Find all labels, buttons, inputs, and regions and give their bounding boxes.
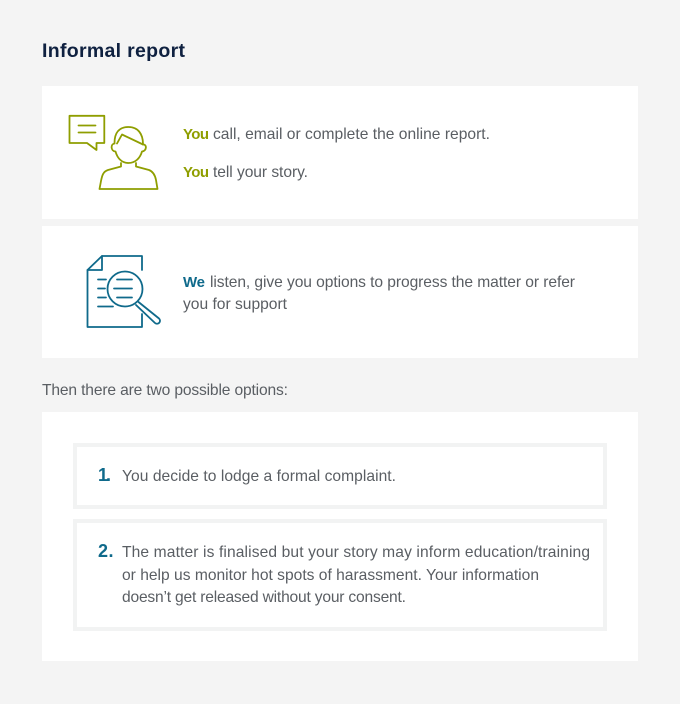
icon: person with speech bubble [70, 116, 158, 189]
option 1 [75, 445, 605, 507]
text: we listen [183, 274, 575, 313]
panel: you report [42, 86, 638, 219]
option 1: 1. [98, 465, 111, 485]
option 2: or help us monitor hot spots of harassment. Your information [122, 567, 539, 584]
panel: we listen [42, 226, 638, 358]
text: you tell: tell your story. [213, 164, 308, 181]
icon: document with magnifier [88, 256, 160, 327]
text: you tell: You [183, 164, 209, 181]
option 2 [75, 521, 605, 629]
option 2: 2. [98, 541, 114, 561]
option 2: The matter is finalised but your story may inform education/training [122, 544, 590, 561]
title: Informal report [42, 40, 186, 62]
text: you call: call, email or complete the online report. [213, 126, 490, 143]
text: we listen: listen, give you options to progress the matter or refer [210, 274, 575, 291]
panel: options [42, 412, 638, 661]
text: two options intro: Then there are two possible options: [42, 382, 288, 399]
option 2: doesn’t get released without your consent. [122, 589, 406, 606]
option 1: You decide to lodge a formal complaint. [122, 468, 396, 485]
text: we listen: you for support [183, 296, 288, 313]
text: we listen: We [183, 274, 205, 291]
text: you call: You [183, 126, 209, 143]
